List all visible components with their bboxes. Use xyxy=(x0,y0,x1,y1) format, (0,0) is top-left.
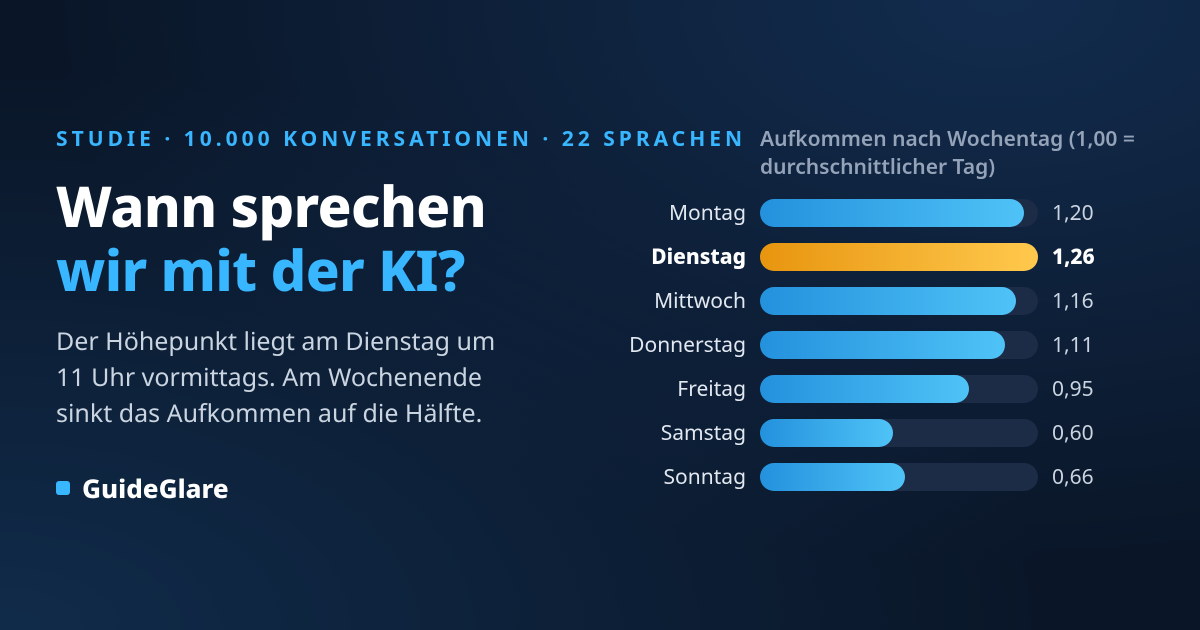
panel: left text column xyxy=(56,125,746,506)
row: Mittwoch: Mittwoch xyxy=(654,287,746,315)
row: Donnerstag xyxy=(629,331,1094,359)
row: Dienstag highlighted xyxy=(651,243,1095,271)
row: Sonntag xyxy=(664,463,1094,491)
row: Freitag: 0,95 xyxy=(1052,375,1094,403)
description: sinkt das Aufkommen auf die Hälfte. xyxy=(56,396,482,430)
row: Montag: 1,20 xyxy=(1052,199,1094,227)
row: Samstag xyxy=(661,419,1094,447)
brand name: GuideGlare xyxy=(82,470,229,506)
row: Mittwoch xyxy=(654,287,1094,315)
row: Montag: Montag xyxy=(669,199,746,227)
description: 11 Uhr vormittags. Am Wochenende xyxy=(56,360,482,394)
row: Dienstag highlighted: Dienstag xyxy=(651,243,746,271)
row: Sonntag: 0,66 xyxy=(1052,463,1094,491)
eyebrow: STUDIE · 10.000 KONVERSATIONEN · 22 SPRACHEN xyxy=(56,125,746,153)
row: Mittwoch: 1,16 xyxy=(1052,287,1094,315)
panel: bar chart xyxy=(629,125,1135,491)
title: wir mit der KI? xyxy=(56,232,465,308)
icon: brand square xyxy=(56,481,70,495)
row: Donnerstag: 1,11 xyxy=(1052,331,1094,359)
title: Wann sprechen xyxy=(56,168,486,244)
row: Samstag: 0,60 xyxy=(1052,419,1094,447)
description xyxy=(56,324,495,430)
row: Samstag: Samstag xyxy=(661,419,746,447)
description: Der Höhepunkt liegt am Dienstag um xyxy=(56,324,495,358)
row: Dienstag highlighted: 1,26 xyxy=(1052,243,1095,271)
row: Montag xyxy=(669,199,1094,227)
row: Freitag xyxy=(677,375,1094,403)
brand xyxy=(56,470,229,506)
title xyxy=(56,168,486,308)
row: Sonntag: Sonntag xyxy=(664,463,746,491)
chart heading: Aufkommen nach Wochentag (1,00 = durchschnittlicher Tag) xyxy=(760,125,1135,181)
row: Donnerstag: Donnerstag xyxy=(629,331,746,359)
row: Freitag: Freitag xyxy=(677,375,746,403)
